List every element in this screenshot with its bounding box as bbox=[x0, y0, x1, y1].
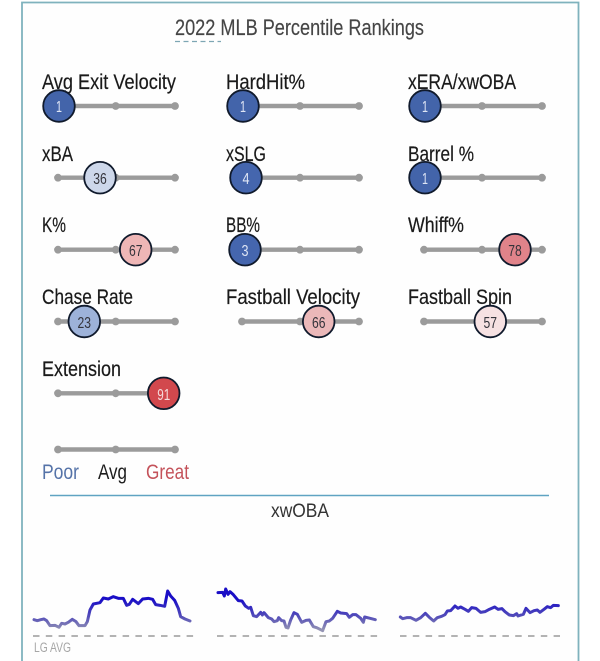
legend: poor, average, great scale bbox=[42, 446, 189, 484]
metric: Extension: Extension bbox=[42, 358, 121, 381]
metric: xERA/xwOBA bbox=[408, 71, 546, 122]
metric: xBA bbox=[42, 143, 179, 194]
metric: HardHit% bbox=[226, 71, 363, 122]
heading: xwOBA: xwOBA bbox=[271, 500, 329, 522]
metric: Whiff% bbox=[408, 214, 546, 266]
metric: HardHit%: HardHit% bbox=[226, 71, 305, 94]
metric: Barrel % bbox=[408, 143, 546, 194]
chart: xwOBA rolling line, first period bbox=[33, 591, 194, 655]
metric: Chase Rate bbox=[42, 286, 179, 337]
chart: xwOBA rolling line, first period: LG AVG bbox=[34, 640, 71, 655]
metric: xSLG: 4 bbox=[242, 171, 250, 188]
metric: xSLG: xSLG bbox=[226, 143, 266, 166]
legend: poor, average, great scale: Poor bbox=[42, 461, 79, 484]
metric: Barrel %: 1 bbox=[422, 171, 428, 188]
metric: Chase Rate: 23 bbox=[78, 315, 91, 332]
metric: Fastball Velocity: 66 bbox=[312, 315, 326, 332]
metric: Fastball Spin bbox=[408, 286, 546, 337]
metric: xERA/xwOBA: xERA/xwOBA bbox=[408, 71, 516, 94]
title dashed underline bbox=[175, 40, 221, 42]
metric: HardHit%: 1 bbox=[240, 99, 246, 116]
metric: BB%: BB% bbox=[226, 214, 260, 237]
metric: xBA: 36 bbox=[93, 171, 107, 188]
metric: Avg Exit Velocity bbox=[42, 71, 179, 122]
metric: K% bbox=[42, 214, 179, 266]
metric: K%: K% bbox=[42, 214, 66, 237]
metric: Extension: 91 bbox=[157, 387, 170, 404]
metric: xERA/xwOBA: 1 bbox=[422, 99, 428, 116]
title: 2022 MLB Percentile Rankings bbox=[175, 15, 424, 40]
metric: Fastball Velocity: Fastball Velocity bbox=[226, 286, 360, 309]
metric: Avg Exit Velocity: 1 bbox=[56, 99, 62, 116]
metric: Fastball Spin: 57 bbox=[484, 315, 497, 332]
metric: BB%: 3 bbox=[242, 243, 249, 260]
metric: xBA: xBA bbox=[42, 143, 73, 166]
metric: BB% bbox=[226, 214, 363, 266]
chart: xwOBA rolling line, second period bbox=[217, 589, 378, 636]
metric: Barrel %: Barrel % bbox=[408, 143, 474, 166]
metric: Fastball Velocity bbox=[226, 286, 363, 337]
legend: poor, average, great scale: Great bbox=[146, 461, 189, 484]
metric: K%: 67 bbox=[129, 243, 143, 260]
metric: Extension bbox=[42, 358, 180, 409]
metric: Chase Rate: Chase Rate bbox=[42, 286, 133, 309]
metric: Avg Exit Velocity: Avg Exit Velocity bbox=[42, 71, 176, 94]
legend: poor, average, great scale: Avg bbox=[98, 461, 127, 484]
metric: xSLG bbox=[226, 143, 363, 194]
metric: Whiff%: Whiff% bbox=[408, 214, 464, 237]
metric: Fastball Spin: Fastball Spin bbox=[408, 286, 512, 309]
metric: Whiff%: 78 bbox=[508, 243, 522, 260]
chart: xwOBA rolling line, third period bbox=[400, 605, 560, 636]
